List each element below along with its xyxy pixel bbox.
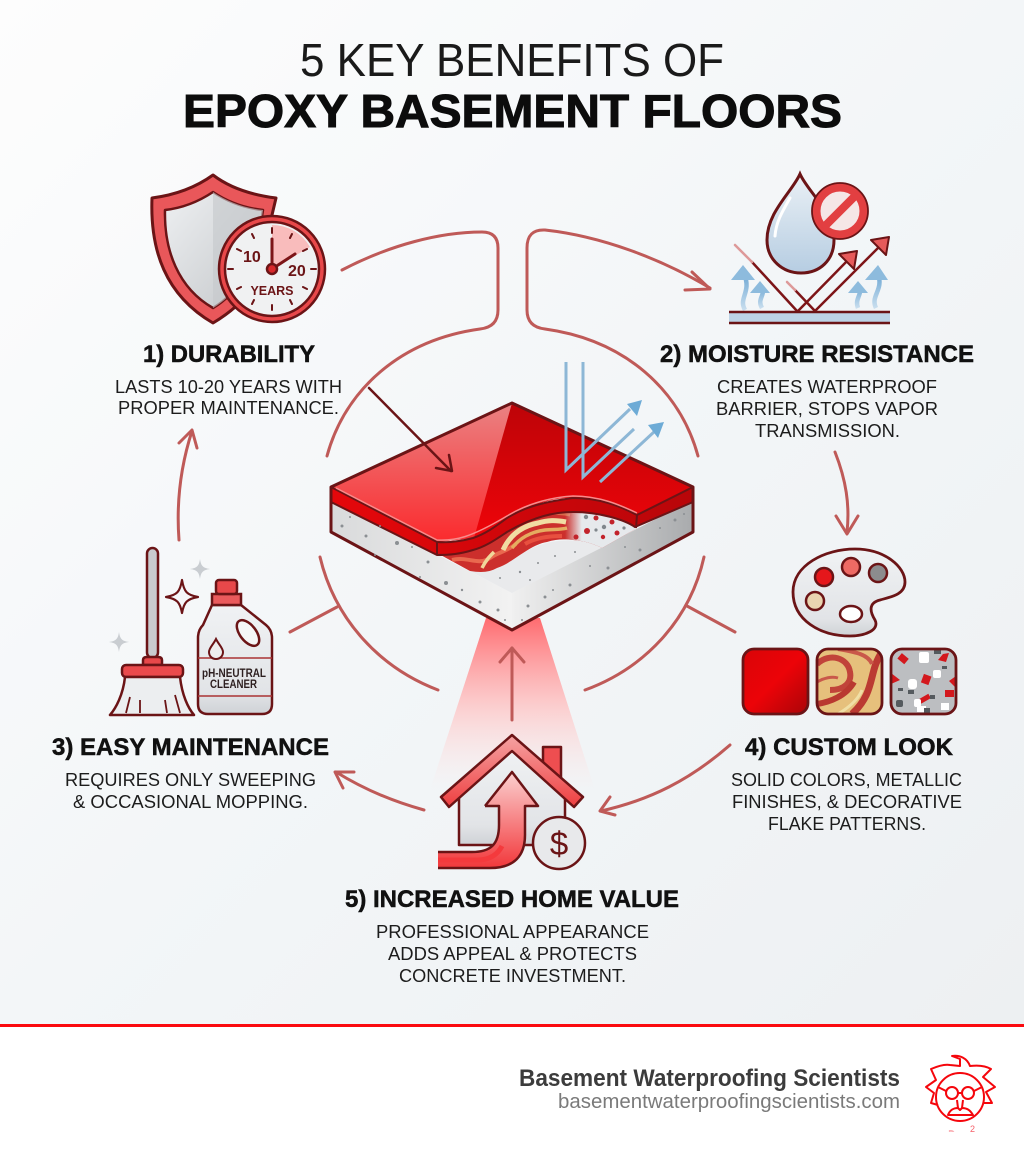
text: custom look bbox=[731, 734, 962, 834]
footer bbox=[0, 1024, 1024, 1132]
icon: broom and cleaner bottle: pH-NEUTRAL bbox=[202, 668, 266, 680]
website: basementwaterproofingscientists.com bbox=[558, 1091, 900, 1113]
light beam from house to slab bbox=[430, 618, 595, 790]
prohibition sign bbox=[816, 188, 864, 234]
sparkles bbox=[166, 580, 198, 613]
text: increased home value: CONCRETE INVESTMENT. bbox=[399, 966, 626, 986]
barrier plate bbox=[729, 312, 890, 323]
text: custom look: 4) CUSTOM LOOK bbox=[745, 734, 954, 761]
clock bbox=[219, 216, 325, 322]
logo clipped caption: D bbox=[948, 1129, 956, 1141]
logo: scientist face bbox=[926, 1056, 995, 1141]
chimney bbox=[543, 747, 561, 785]
drop bbox=[767, 174, 834, 273]
icon: broom and cleaner bottle: CLEANER bbox=[210, 679, 258, 691]
shield bbox=[152, 175, 276, 323]
text: easy maintenance: & OCCASIONAL MOPPING. bbox=[73, 792, 308, 812]
text: durability: LASTS 10-20 YEARS WITH bbox=[115, 377, 342, 397]
swatch: solid red bbox=[743, 649, 808, 714]
concrete right face bbox=[512, 500, 693, 630]
text: moisture resistance: TRANSMISSION. bbox=[755, 421, 900, 441]
text: increased home value bbox=[345, 886, 679, 986]
icon: water drop and moisture barrier bbox=[729, 174, 890, 323]
icon: house with rising arrow and dollar coin bbox=[438, 735, 585, 869]
palette bbox=[793, 549, 905, 636]
swatch: decorative flakes bbox=[891, 649, 956, 714]
arrow into epoxy surface bbox=[369, 388, 452, 471]
text: increased home value: PROFESSIONAL APPEARANCE bbox=[376, 922, 649, 942]
text: custom look: FLAKE PATTERNS. bbox=[768, 814, 926, 834]
logo superscript: 2 bbox=[970, 1124, 975, 1134]
text: durability: 1) DURABILITY bbox=[143, 341, 315, 368]
text: easy maintenance bbox=[52, 734, 329, 812]
icon: shield and clock bbox=[152, 175, 325, 323]
roof bbox=[441, 735, 583, 807]
text: moisture resistance: BARRIER, STOPS VAPOR bbox=[716, 399, 938, 419]
title: 5 KEY BENEFITS OF bbox=[300, 34, 724, 86]
icon: shield and clock: 10 bbox=[243, 249, 261, 266]
swoosh arrow bbox=[438, 772, 538, 868]
cycle connector lines bbox=[178, 230, 858, 815]
red epoxy top surface bbox=[331, 403, 693, 542]
text: easy maintenance: REQUIRES ONLY SWEEPING bbox=[65, 770, 316, 790]
text: moisture resistance: 2) MOISTURE RESISTANCE bbox=[660, 341, 974, 368]
concrete left face bbox=[331, 500, 512, 630]
icon: broom and cleaner bottle bbox=[109, 548, 272, 715]
text: durability bbox=[115, 341, 342, 418]
icon: house with rising arrow and dollar coin: $ bbox=[550, 825, 568, 862]
gloss edge highlight bbox=[336, 488, 637, 540]
glossy highlight bbox=[331, 403, 512, 542]
dollar coin bbox=[533, 817, 585, 869]
swatch: metallic swirl bbox=[817, 649, 882, 714]
slab outline bbox=[331, 403, 693, 630]
icon: shield and clock: 20 bbox=[288, 263, 306, 280]
exposed concrete top bbox=[462, 540, 603, 593]
broom bbox=[147, 548, 158, 658]
bottle bbox=[198, 605, 272, 714]
company name: Basement Waterproofing Scientists bbox=[519, 1065, 900, 1092]
text: custom look: SOLID COLORS, METALLIC bbox=[731, 770, 962, 790]
epoxy layer edge bbox=[331, 487, 693, 555]
text: custom look: FINISHES, & DECORATIVE bbox=[732, 792, 962, 812]
reflection lines bbox=[735, 244, 882, 311]
concrete specks bbox=[340, 513, 685, 621]
icon: shield and clock: YEARS bbox=[250, 284, 294, 298]
title: EPOXY BASEMENT FLOORS bbox=[183, 85, 842, 137]
text: moisture resistance: CREATES WATERPROOF bbox=[717, 377, 937, 397]
icon: palette and finish swatches bbox=[743, 549, 956, 714]
text: increased home value: ADDS APPEAL & PROTECTS bbox=[388, 944, 637, 964]
arrow: house value up to slab bbox=[500, 648, 524, 720]
text: moisture resistance bbox=[660, 341, 974, 441]
title bbox=[183, 34, 842, 137]
text: durability: PROPER MAINTENANCE. bbox=[118, 398, 339, 418]
wavy vapor arrows bbox=[743, 274, 880, 310]
text: increased home value: 5) INCREASED HOME VALUE bbox=[345, 886, 679, 913]
blue reflection arrows bbox=[566, 362, 664, 482]
text: easy maintenance: 3) EASY MAINTENANCE bbox=[52, 734, 329, 761]
epoxy slab illustration bbox=[331, 362, 693, 630]
swirl metallic layer bbox=[442, 513, 637, 572]
house walls bbox=[459, 745, 565, 845]
